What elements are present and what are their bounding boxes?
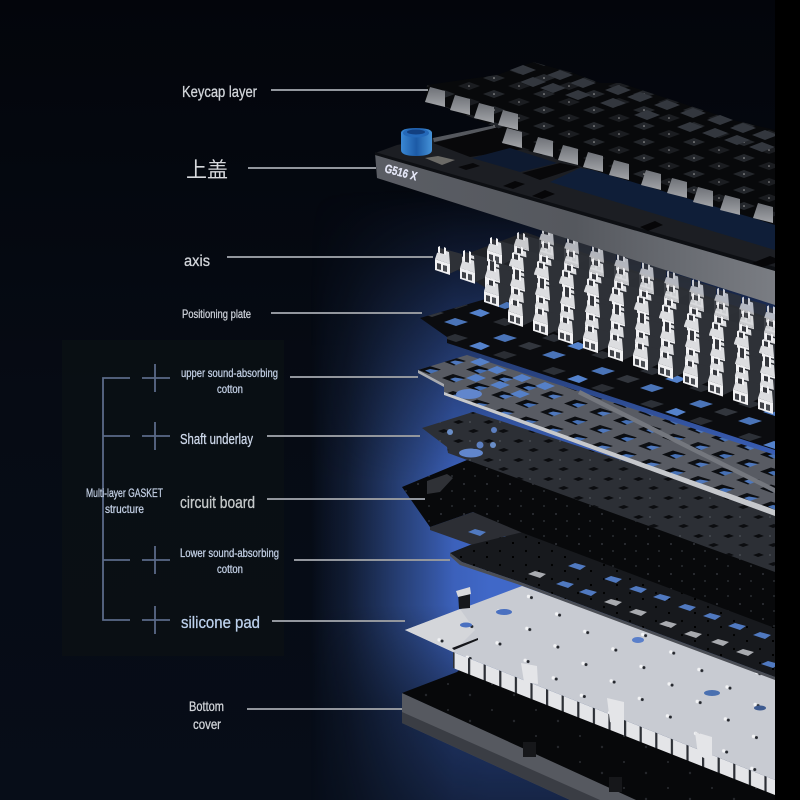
label: circuit board: circuit board: [180, 494, 255, 512]
gasket bracket and crosses: [103, 364, 170, 634]
keycap layer: [425, 62, 778, 225]
label: lower sound-absorbing cotton: cotton: [217, 562, 243, 576]
bottom cover layer: [402, 660, 790, 800]
label: silicone pad: silicone pad: [181, 613, 260, 632]
label: multi-layer gasket structure: Multi-layer GASKET: [86, 486, 163, 500]
shaft underlay layer: [422, 412, 775, 572]
label lines: [227, 90, 450, 709]
label: upper sound-absorbing cotton: cotton: [217, 382, 243, 396]
top cover layer: [375, 122, 775, 305]
label: bottom cover: Bottom: [189, 698, 224, 714]
label: top cover: 上盖: [186, 154, 228, 184]
icon: blue volume knob: [401, 128, 432, 156]
label: keycap layer: Keycap layer: [182, 84, 258, 101]
circuit board layer: [402, 460, 775, 628]
label: lower sound-absorbing cotton: Lower sound-absorbing: [180, 546, 279, 560]
label: shaft underlay: Shaft underlay: [180, 432, 254, 448]
switch axis layer: [435, 227, 800, 440]
lower sound-absorbing cotton layer: [430, 512, 779, 680]
silicone pad layer: [405, 586, 775, 795]
positioning plate layer: [420, 292, 775, 450]
label: axis: axis: [184, 253, 210, 270]
label: positioning plate: Positioning plate: [182, 307, 251, 321]
model label G516 X: G516 X: [383, 161, 419, 183]
right black strip: [775, 0, 800, 800]
upper sound-absorbing cotton layer: [418, 355, 775, 516]
label: multi-layer gasket structure: structure: [105, 502, 144, 516]
label: upper sound-absorbing cotton: upper sound-absorbing: [181, 366, 278, 380]
label: bottom cover: cover: [193, 716, 221, 732]
